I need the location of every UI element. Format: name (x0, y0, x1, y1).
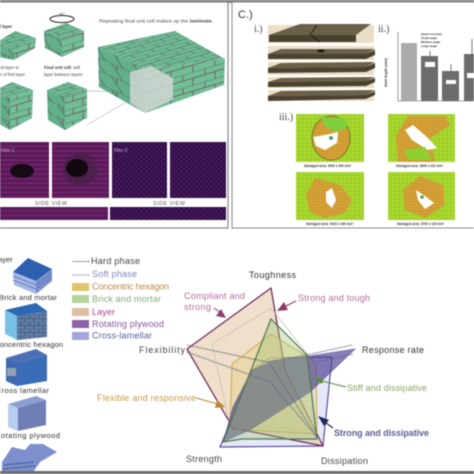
c-scan 3: Damaged area: 3024 ± 160 mm² (306, 222, 353, 226)
micrograph: hierarchy 2 damaged (170, 142, 226, 198)
polygon: cross-lamellar (220, 357, 332, 447)
guide lines (87, 91, 130, 125)
line: hard phase (187, 345, 352, 362)
axis label: toughness: Toughness (249, 270, 296, 280)
label iii: iii.) (279, 112, 293, 123)
legend: soft phase: Soft phase (92, 269, 137, 279)
text: second layer (0, 65, 26, 77)
c-scan 4 (388, 172, 455, 226)
panel: laminate unit cell (0, 2, 228, 228)
chart legend: Medium angle (421, 40, 441, 44)
rotation label: 90° (59, 12, 65, 16)
label ii: ii.) (378, 24, 389, 35)
callout: compliant and strong (184, 291, 245, 318)
text: final unit cell: layer between layers (44, 72, 82, 77)
cube: final unit cell (47, 82, 87, 130)
heading: repeating unit cell: Repeating final unit cell makes up the laminate. (99, 18, 213, 24)
polygon: brick and mortar (223, 319, 317, 442)
structure: brick and mortar (5, 303, 47, 340)
c-scan 3 (296, 172, 364, 226)
impact plates stack (268, 24, 375, 101)
grid (212, 308, 312, 430)
panel: experimental results (232, 2, 474, 228)
polygon: rotating plywood (223, 349, 355, 442)
callout: stiff and dissipative: Stiff and dissipative (347, 383, 427, 393)
polygon: concentric hexagon (230, 334, 317, 434)
bar: quasi isotropic (401, 43, 417, 101)
callout: flexible and responsive: Flexible and responsive (97, 393, 196, 403)
cube: mirrored layer (0, 82, 33, 130)
text: final unit cell (44, 65, 82, 77)
micrograph: hierarchy 1 intact: Hier-1 (1, 148, 15, 154)
callout: strong and tough: Strong and tough (298, 293, 370, 303)
legend: hard phase: Hard phase (91, 256, 140, 266)
c-scan 1: Damaged area: 4000 ± 300 mm² (304, 164, 351, 168)
axis label: response rate: Response rate (362, 345, 424, 355)
c-scan 4: Damaged area: 3700 ± 115 mm² (397, 222, 444, 226)
axis label: dissipation: Dissipation (321, 456, 368, 466)
micrograph: hierarchy 2 intact: Hier-2 (114, 148, 128, 154)
callout: strong and tough (277, 293, 370, 311)
top border band (0, 0, 474, 3)
highlighted unit cell (130, 66, 173, 113)
bottom border band (0, 471, 474, 474)
side view strip left (0, 207, 108, 220)
axis label: flexibility: Flexibility (139, 345, 186, 355)
structure: concentric hexagon (6, 349, 47, 386)
micrograph: hierarchy 2 intact (112, 142, 167, 198)
cube: first layer (0, 31, 36, 60)
chart legend: Small angle (421, 36, 437, 40)
callout: strong and dissipative: Strong and dissipative (334, 428, 429, 438)
polygon: layer (187, 288, 323, 446)
panel: structure comparison (0, 240, 429, 471)
structure: layer (13, 258, 52, 294)
c-scan 1 (296, 114, 364, 168)
side view label right: SIDE VIEW (153, 201, 186, 207)
rotation label (50, 12, 74, 22)
legend: layer: Layer (92, 307, 115, 317)
legend: brick and mortar: Brick and mortar (92, 294, 161, 304)
laminate block (98, 31, 225, 113)
side view label left: SIDE VIEW (35, 201, 68, 207)
callout: strong and dissipative (318, 416, 429, 438)
bar: small angle (421, 51, 438, 101)
bar: medium angle (442, 64, 459, 101)
structure: cross lamellar (8, 396, 46, 431)
micrograph: hierarchy 1 intact (0, 142, 49, 198)
legend: rotating plywood: Rotating plywood (92, 319, 164, 329)
label i: i.) (254, 24, 263, 35)
c-scan 2: Damaged area: 3600 ± 210 mm² (396, 164, 443, 168)
callout: compliant and strong: Compliant and (184, 291, 245, 301)
legend: concentric hexagon: Concentric hexagon (92, 282, 169, 292)
callout: stiff and dissipative (312, 378, 427, 393)
structure: rotating plywood (2, 444, 57, 471)
axis title: Dent Depth (mm) (384, 57, 388, 87)
bar chart: dent depth (384, 32, 474, 101)
chart legend (421, 32, 443, 48)
cube: rotated layer (44, 23, 84, 57)
text: final unit cell: Final unit cell: soft (44, 65, 81, 70)
radar chart (187, 288, 355, 447)
label: brick and mortar: Brick and mortar (0, 293, 58, 302)
callout: compliant and strong: strong (184, 302, 211, 312)
callout: flexible and responsive (97, 393, 225, 408)
side view strip right (110, 207, 226, 220)
micrograph: hierarchy 1 damaged (52, 142, 109, 198)
chart legend: Quasi-isotropic (421, 32, 443, 36)
axis label: strength: Strength (186, 454, 222, 464)
legend: cross-lamellar: Cross-lamellar (92, 330, 152, 340)
bar: large angle (464, 39, 474, 101)
panel letter C: C.) (238, 9, 253, 21)
c-scan 2 (388, 114, 455, 168)
legend (72, 256, 169, 340)
chart legend: Large angle (421, 44, 438, 48)
line: soft phase (187, 352, 353, 437)
